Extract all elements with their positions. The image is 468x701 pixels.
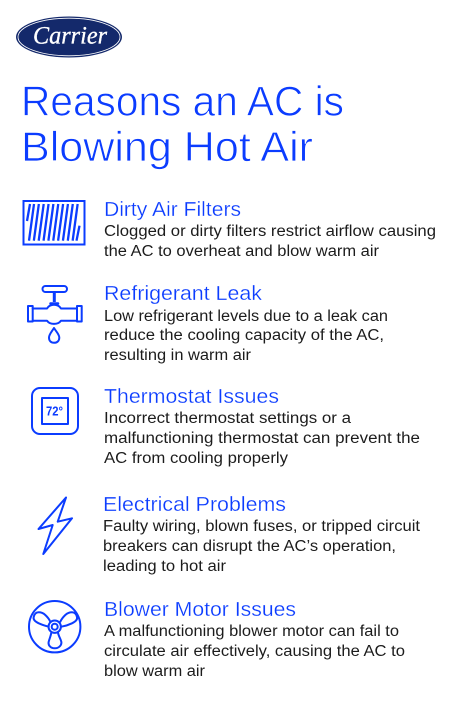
- section: Refrigerant Leak: resulting in warm air: [104, 347, 251, 364]
- icon: thermostat: [32, 388, 78, 434]
- section: Electrical Problems: Faulty wiring, blown fuses, or tripped circuit: [103, 518, 421, 535]
- section: Blower Motor Issues: Blower Motor Issues: [104, 599, 296, 621]
- icon: air filter: [24, 201, 84, 244]
- logo: Carrier: [16, 16, 122, 58]
- section: Refrigerant Leak: reduce the cooling capacity of the AC,: [104, 327, 384, 344]
- section: Dirty Air Filters: Clogged or dirty filters restrict airflow causing: [104, 223, 436, 240]
- logo: Carrier: Carrier: [33, 22, 107, 50]
- section: Thermostat Issues: Incorrect thermostat settings or a: [104, 410, 351, 427]
- section: Thermostat Issues: Thermostat Issues: [104, 386, 279, 408]
- section: Blower Motor Issues: [104, 599, 405, 680]
- section: Refrigerant Leak: [104, 283, 388, 364]
- section: Thermostat Issues: [104, 386, 420, 467]
- section: Refrigerant Leak: Low refrigerant levels due to a leak can: [104, 308, 388, 325]
- title: [21, 78, 344, 170]
- section: Dirty Air Filters: the AC to overheat and blow warm air: [104, 243, 379, 260]
- section: Electrical Problems: [103, 494, 421, 575]
- section: Blower Motor Issues: A malfunctioning blower motor can fail to: [104, 623, 399, 640]
- section: Blower Motor Issues: blow warm air: [104, 663, 205, 680]
- section: Dirty Air Filters: Dirty Air Filters: [104, 199, 241, 221]
- section: Dirty Air Filters: [104, 199, 436, 260]
- icon: thermostat: 72°: [46, 405, 63, 419]
- section: Blower Motor Issues: circulate air effectively, causing the AC to: [104, 643, 405, 660]
- section: Refrigerant Leak: Refrigerant Leak: [104, 283, 263, 305]
- title: Blowing Hot Air: [21, 123, 313, 170]
- section: Electrical Problems: leading to hot air: [103, 558, 226, 575]
- icon: lightning bolt: [38, 498, 72, 554]
- section: Thermostat Issues: malfunctioning thermostat can prevent the: [104, 430, 420, 447]
- section: Thermostat Issues: AC from cooling properly: [104, 450, 288, 467]
- icon: leaking valve: [28, 286, 82, 343]
- icon: blower fan: [29, 601, 80, 652]
- title: Reasons an AC is: [21, 78, 344, 124]
- section: Electrical Problems: Electrical Problems: [103, 494, 286, 516]
- section: Electrical Problems: breakers can disrupt the AC’s operation,: [103, 538, 396, 555]
